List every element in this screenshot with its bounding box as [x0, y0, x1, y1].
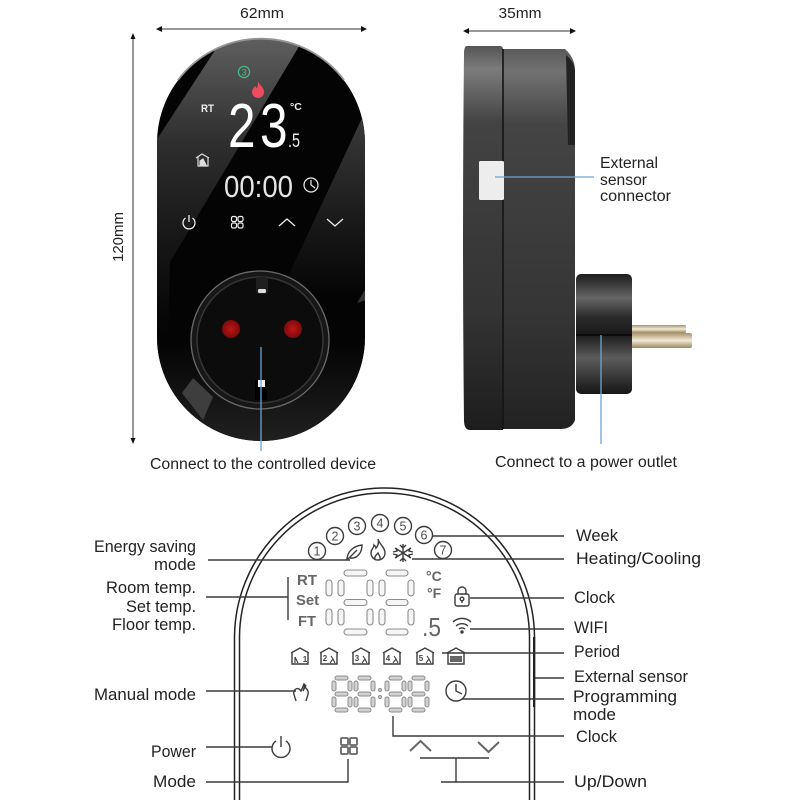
display mode labels: FT	[298, 613, 316, 630]
dimension: 35mm depth: 35mm	[498, 5, 542, 22]
display mode labels: Set	[296, 592, 319, 609]
leader: sensor connector	[495, 176, 594, 178]
week day numbers: 3	[354, 520, 361, 534]
period 2: 2	[323, 654, 328, 663]
seven segment clock display	[332, 676, 429, 712]
icon: manual hand	[294, 684, 308, 701]
icon: lock	[455, 587, 469, 606]
right callout labels: Up/Down	[574, 773, 647, 791]
left callout labels: Mode	[153, 773, 196, 791]
period 3	[352, 648, 370, 664]
room temperature reading: 23	[228, 91, 292, 160]
unit: °C	[290, 101, 302, 113]
left callout labels: mode	[154, 556, 196, 574]
seven segment temperature display	[326, 570, 414, 635]
right callout labels	[573, 527, 701, 791]
caption: side: Connect to a power outlet	[495, 454, 678, 471]
label: external sensor connector: External	[600, 155, 658, 172]
unit labels: °F	[427, 585, 442, 601]
caption: front: Connect to the controlled device	[150, 456, 376, 473]
plug body	[576, 274, 632, 394]
decimal reading: .5	[288, 131, 300, 152]
right callout labels: Clock	[576, 728, 618, 746]
left callout labels: Energy saving	[94, 538, 196, 556]
clock reading: 00:00	[224, 169, 293, 204]
icon: period house	[196, 154, 209, 166]
label: external sensor connector: connector	[600, 188, 671, 205]
right callout labels: Period	[574, 643, 620, 661]
week day numbers: 7	[440, 544, 447, 558]
icon: power button	[272, 736, 290, 757]
icon: down arrow	[478, 742, 499, 752]
period 3: 3	[355, 654, 360, 663]
icon: clock	[304, 178, 318, 192]
week day numbers: 1	[314, 544, 321, 558]
label RT: RT	[201, 103, 214, 115]
silver top rim	[178, 39, 344, 80]
week indicator	[238, 66, 250, 78]
label: external sensor connector: sensor	[600, 172, 647, 189]
week day numbers: 5	[400, 520, 407, 534]
dimension: 35mm depth	[463, 5, 576, 34]
right callout labels: mode	[573, 706, 616, 724]
icon: wifi	[453, 618, 471, 633]
dimension: 120mm height: 120mm	[110, 212, 127, 262]
right callout labels: Programming	[573, 688, 677, 706]
period 6	[447, 648, 465, 664]
decimal digit: .5	[422, 612, 441, 642]
sensor connector port	[479, 161, 504, 200]
period 4	[383, 648, 401, 664]
icon: down chevron	[327, 219, 343, 226]
icon: power	[183, 215, 195, 229]
rear housing	[503, 49, 575, 429]
plug pins	[630, 325, 692, 348]
left callout labels	[94, 538, 196, 791]
period 2	[320, 648, 338, 664]
panel: thermostat front view	[150, 38, 380, 451]
left callout labels: Set temp.	[126, 598, 196, 616]
leader line	[260, 347, 262, 451]
period 4: 4	[386, 654, 391, 663]
dimension: 62mm width: 62mm	[240, 5, 284, 22]
unit labels: °C	[426, 568, 442, 584]
panel: display diagram outline	[234, 488, 535, 800]
week day numbers: 6	[421, 528, 428, 542]
period icons	[291, 648, 465, 664]
socket	[191, 271, 329, 409]
right callout labels: External sensor	[574, 668, 688, 686]
period 1: 1	[303, 655, 308, 664]
dimension: 62mm width	[156, 5, 367, 32]
week indicator: 3	[241, 68, 247, 78]
right callout labels: WIFI	[574, 619, 608, 637]
period 5: 5	[419, 654, 424, 663]
right callout labels: Clock	[574, 589, 616, 607]
unit labels	[426, 568, 442, 601]
dimension: 120mm height	[110, 33, 136, 444]
icon: programming clock	[446, 681, 466, 701]
icon: mode	[232, 216, 243, 228]
icon: flame	[252, 81, 264, 98]
week day numbers: 4	[377, 516, 384, 530]
icon: heating flame	[371, 539, 385, 560]
leader lines: left and right callouts	[206, 536, 564, 782]
left callout labels: Power	[151, 743, 196, 761]
panel: thermostat side view	[463, 46, 692, 444]
display mode labels	[296, 572, 319, 630]
leader: power outlet	[600, 335, 602, 444]
device body	[150, 38, 380, 441]
period 1	[291, 648, 309, 664]
icon: cooling snowflake	[393, 544, 413, 562]
display mode labels: RT	[297, 572, 317, 589]
right callout labels: Heating/Cooling	[576, 550, 701, 568]
icon: mode button	[341, 738, 357, 754]
left callout labels: Floor temp.	[112, 616, 196, 634]
front housing	[463, 46, 503, 430]
icon: leaf	[347, 545, 362, 560]
icon: up chevron	[279, 219, 295, 226]
left callout labels: Manual mode	[94, 686, 196, 704]
icon: up arrow	[410, 741, 431, 751]
right callout labels: Week	[576, 527, 619, 545]
week day numbers: 2	[332, 530, 339, 544]
week day numbers	[308, 514, 452, 560]
left callout labels: Room temp.	[106, 579, 196, 597]
label: external sensor connector	[600, 155, 671, 205]
period 5	[416, 648, 434, 664]
